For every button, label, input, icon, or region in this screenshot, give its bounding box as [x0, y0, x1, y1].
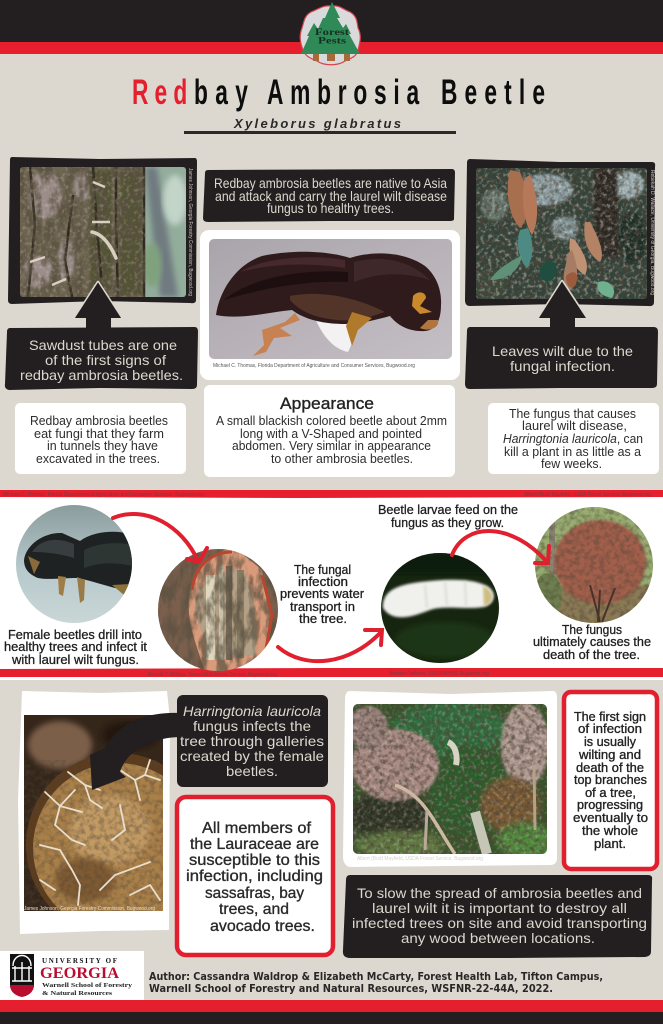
text block: step 2 — [280, 562, 365, 626]
callout: first sign of infection: wilting and — [578, 747, 641, 762]
text block: beetles eat fungi: in tunnels they have — [47, 438, 158, 453]
callout: leaves wilt: Leaves wilt due to the — [492, 343, 633, 359]
callout: fungus infects the tree: created by the female — [180, 748, 324, 764]
icon: Forest Pests badge — [300, 2, 360, 65]
top header band — [0, 0, 663, 54]
text block: step 3: fungus as they grow. — [391, 515, 504, 530]
callout: native to Asia: Redbay ambrosia beetles are native to Asia — [214, 175, 447, 191]
icon: Forest Pests badge: Forest — [315, 28, 350, 38]
arrow: leaves callout pointing up — [538, 280, 587, 328]
arrow: beetle to bark — [113, 514, 207, 562]
text block: fungus kills plant: laurel wilt disease, — [522, 418, 627, 433]
callout: first sign of infection: top branches — [574, 772, 647, 787]
panel: infected trees photo — [343, 691, 557, 867]
text block: step 2: transport in — [290, 599, 355, 614]
caption: bark photo credit: James Johnson, Georgia Forestry Commission, Bugwood.org — [187, 168, 193, 296]
text block: beetles eat fungi: Redbay ambrosia beetles — [30, 413, 168, 428]
text block: step 2: infection — [298, 574, 348, 589]
callout: sawdust tubes: Sawdust tubes are one — [29, 337, 177, 353]
text block: appearance: abdomen. Very similar in appearance — [232, 438, 431, 453]
callout: Lauraceae members: susceptible to this — [189, 852, 320, 869]
arrow: bark to larva — [278, 630, 382, 661]
text block: step 2: The fungal — [294, 562, 351, 577]
text block: beetles eat fungi: eat fungi that they farm — [34, 426, 164, 441]
callout: Lauraceae members — [177, 797, 333, 955]
callout: leaves wilt: fungal infection. — [510, 358, 615, 374]
callout: fungus infects the tree: tree through galleries — [180, 733, 324, 749]
callout: first sign of infection: of a tree, — [585, 785, 636, 800]
callout: Lauraceae members: the Lauraceae are — [190, 836, 319, 853]
panel: fungal galleries photo — [18, 691, 170, 934]
callout: Lauraceae members: All members of — [202, 820, 312, 837]
callout: native to Asia: fungus to healthy trees. — [267, 200, 394, 216]
callout: slow the spread: infected trees on site and avoid transporting — [352, 915, 647, 931]
callout: first sign of infection: The first sign — [574, 709, 646, 724]
text block: step 1: with laurel wilt fungus. — [11, 652, 139, 667]
callout: first sign of infection: of infection — [578, 721, 642, 736]
callout: sawdust tubes — [5, 327, 198, 390]
callout: Lauraceae members: sassafras, bay — [205, 885, 304, 902]
callout: first sign of infection: plant. — [594, 836, 626, 851]
callout: first sign of infection: progressing — [577, 797, 643, 812]
callout: fungus infects the tree: beetles. — [226, 763, 278, 779]
text block: step 2: the tree. — [299, 611, 347, 626]
arrow: galleries callout curved — [90, 713, 180, 790]
callout: first sign of infection: is usually — [584, 734, 636, 749]
caption: band photo credits — [3, 492, 651, 678]
callout: sawdust tubes: of the first signs of — [45, 352, 166, 368]
heading: appearance: Appearance — [280, 394, 374, 413]
title: Ambrosia — [267, 73, 420, 112]
text block: author credit — [149, 970, 603, 995]
title: Beetle — [441, 73, 545, 112]
callout: Lauraceae members: trees, and — [219, 901, 289, 918]
arrow: larva to dead tree — [452, 531, 549, 563]
callout: first sign of infection — [564, 692, 657, 869]
callout: slow the spread — [343, 875, 652, 958]
caption: band photo credits: Michael C. Thomas, Florida Department of Agriculture and Consumer Services, Bugwood.org — [3, 492, 204, 498]
text block: beetles eat fungi: excavated in the trees. — [36, 451, 160, 466]
callout: fungus infects the tree: Harringtonia lauricola — [183, 703, 321, 719]
icon: arch — [10, 954, 34, 997]
text block: step 1: Female beetles drill into — [8, 627, 142, 642]
text block: step 4 — [533, 622, 651, 662]
text block: fungus kills plant — [488, 403, 659, 474]
logo: University of Georgia: & Natural Resources — [42, 990, 113, 997]
panel: wilted leaves photo — [465, 159, 655, 306]
callout: native to Asia: and attack and carry the laurel wilt disease — [215, 188, 447, 204]
logo: University of Georgia: Warnell School of Forestry — [42, 982, 133, 989]
icon: Forest Pests badge: Pests — [318, 36, 346, 46]
text block: step 4: The fungus — [562, 622, 622, 637]
photo: adult female beetle — [16, 505, 133, 623]
panel: beetle specimen photo — [200, 230, 460, 380]
text block: appearance: long with a V-Shaped and pointed — [240, 426, 422, 441]
text block: step 2: prevents water — [280, 586, 365, 601]
panel: infection cycle band — [0, 490, 663, 680]
footer band — [0, 1000, 663, 1024]
text block: beetles eat fungi — [15, 403, 186, 474]
logo: University of Georgia: UNIVERSITY OF — [42, 957, 117, 965]
text block: author credit: Author: Cassandra Waldrop & Elizabeth McCarty, Forest Health Lab, Tifton Campus, — [149, 970, 603, 983]
text block: appearance: to other ambrosia beetles. — [271, 451, 413, 466]
text block: step 3 — [378, 502, 518, 530]
caption: beetle photo credit: Michael C. Thomas, Florida Department of Agriculture and Consumer Services, Bugwood.org — [213, 363, 415, 369]
callout: first sign of infection: eventually to — [573, 810, 648, 825]
title: Red — [132, 73, 187, 112]
callout: first sign of infection: the whole — [582, 823, 638, 838]
text block: fungus kills plant: few weeks. — [541, 456, 602, 471]
text block: step 1 — [4, 627, 147, 667]
text block: fungus kills plant: Harringtonia lauricola, can — [503, 431, 643, 446]
caption: fungus photo credit: James Johnson, Georgia Forestry Commission, Bugwood.org — [24, 906, 155, 912]
title: bay — [194, 73, 248, 112]
photo: infected tree bark — [156, 548, 280, 672]
caption: trees photo credit: Albert (Bud) Mayfield, USDA Forest Service, Bugwood.org — [357, 856, 483, 862]
subtitle: scientific name: Xyleborus glabratus — [233, 116, 401, 131]
text block: step 1: healthy trees and infect it — [4, 639, 147, 654]
callout: slow the spread: laurel wilt it is important to destroy all — [372, 900, 627, 916]
text block: step 3: Beetle larvae feed on the — [378, 502, 518, 517]
logo: University of Georgia: GEORGIA — [40, 965, 119, 982]
callout: first sign of infection: death of the — [576, 760, 644, 775]
callout: native to Asia — [203, 169, 455, 222]
text block: appearance — [204, 385, 455, 477]
callout: Lauraceae members: infection, including — [186, 868, 323, 885]
callout: Lauraceae members: avocado trees. — [210, 918, 315, 935]
text block: appearance: A small blackish colored beetle about 2mm — [216, 413, 447, 428]
text block: step 4: ultimately causes the — [533, 634, 651, 649]
title — [132, 73, 545, 112]
caption: leaves photo credit: Rebekah D. Wallace, University of Georgia, Bugwood.org — [649, 170, 655, 295]
photo: beetle larva — [380, 552, 500, 664]
text block: step 4: death of the tree. — [543, 647, 640, 662]
caption: band photo credits: Albert (Bud) Mayfield, USDA Forest Service, Bugwood.org — [524, 492, 651, 498]
callout: fungus infects the tree: fungus infects the — [193, 718, 311, 734]
text block: fungus kills plant: The fungus that causes — [509, 406, 636, 421]
callout: slow the spread: To slow the spread of ambrosia beetles and — [357, 885, 642, 901]
text block: fungus kills plant: kill a plant in as little as a — [504, 444, 642, 459]
caption: band photo credits: Ronald F. Billings, Texas A&M Forest Service, Bugwood.org — [148, 672, 277, 678]
callout: fungus infects the tree — [177, 695, 328, 787]
callout: slow the spread: any wood between locations. — [401, 930, 595, 946]
text block: author credit: Warnell School of Forestry and Natural Resources, WSFNR-22-44A, 2022. — [149, 982, 553, 995]
photo: dying tree — [534, 506, 654, 624]
panel: sawdust tubes photo — [8, 157, 197, 304]
subtitle: scientific name — [184, 116, 456, 134]
callout: leaves wilt — [465, 327, 658, 389]
callout: sawdust tubes: redbay ambrosia beetles. — [20, 367, 183, 383]
caption: band photo credits: Andrew Derksen, USDA APHIS, Bugwood.org — [389, 671, 489, 677]
arrow: sawdust callout pointing up — [74, 281, 122, 328]
logo: University of Georgia — [0, 951, 144, 1000]
